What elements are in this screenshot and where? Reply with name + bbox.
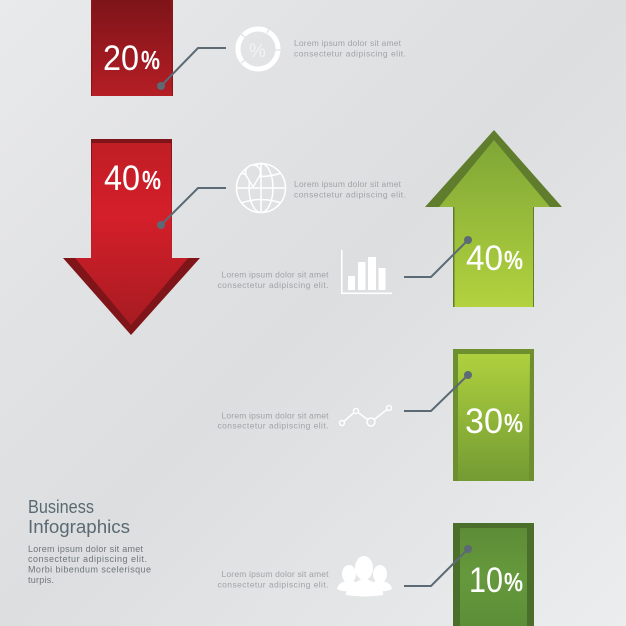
value: 20%	[103, 39, 160, 78]
text: row 5: Lorem ipsum dolor sit amet	[222, 569, 329, 579]
value: 40%: 40	[466, 239, 503, 278]
icon: bar chart	[341, 250, 392, 294]
value: 30%	[465, 402, 523, 441]
value: 30%: 30	[465, 402, 503, 441]
text: row 1	[294, 38, 406, 58]
value: 10%: %	[504, 567, 523, 597]
value: 40%	[466, 239, 523, 278]
text: row 1: consectetur adipiscing elit.	[294, 48, 406, 58]
text: row 3	[218, 270, 329, 290]
text: row 3: consectetur adipiscing elit.	[218, 280, 328, 290]
icon: percent ring: %	[249, 41, 266, 62]
green bar: 10%	[453, 523, 534, 626]
value: 20%: 20	[103, 39, 139, 78]
connector: 40% red	[157, 188, 226, 229]
text block: description	[28, 544, 151, 585]
green bar: 30%	[453, 349, 534, 481]
text: row 4: Lorem ipsum dolor sit amet	[222, 410, 329, 420]
text: row 4	[218, 410, 329, 430]
red bar: 20%	[91, 0, 173, 96]
text block: description: Morbi bibendum scelerisque	[28, 564, 151, 574]
icon: people	[337, 556, 392, 596]
text: row 2: Lorem ipsum dolor sit amet	[294, 179, 402, 189]
title	[28, 497, 130, 537]
text: row 4: consectetur adipiscing elit.	[218, 420, 328, 430]
connector: 20%	[157, 48, 226, 90]
value: 30%: %	[504, 408, 523, 438]
value: 40%: %	[504, 245, 523, 275]
connector: 30%	[404, 371, 472, 411]
text: row 1: Lorem ipsum dolor sit amet	[294, 38, 402, 48]
green arrow: 40%	[425, 130, 562, 307]
connector: 10%	[404, 545, 472, 586]
value: 10%: 10	[469, 561, 503, 600]
value: 40%: 40	[104, 159, 140, 198]
text: row 5	[218, 569, 329, 590]
title: Business	[28, 497, 94, 517]
icon: globe with pin	[236, 164, 286, 212]
value: 20%: %	[141, 45, 160, 75]
text: row 5: consectetur adipiscing elit.	[218, 580, 328, 590]
icon: percent ring	[238, 27, 282, 69]
text: row 2	[294, 179, 406, 200]
value: 40%	[104, 159, 161, 198]
title: Infographics	[28, 517, 130, 537]
text block: description: Lorem ipsum dolor sit amet	[28, 544, 143, 554]
text block: description: consectetur adipiscing elit.	[28, 554, 147, 564]
red arrow: 40%	[63, 139, 200, 335]
text: row 3: Lorem ipsum dolor sit amet	[222, 270, 329, 280]
icon: line chart	[340, 406, 392, 426]
value: 40%: %	[142, 165, 161, 195]
text: row 2: consectetur adipiscing elit.	[294, 190, 406, 200]
connector: green 40%	[404, 236, 472, 277]
text block: description: turpis.	[28, 575, 54, 585]
